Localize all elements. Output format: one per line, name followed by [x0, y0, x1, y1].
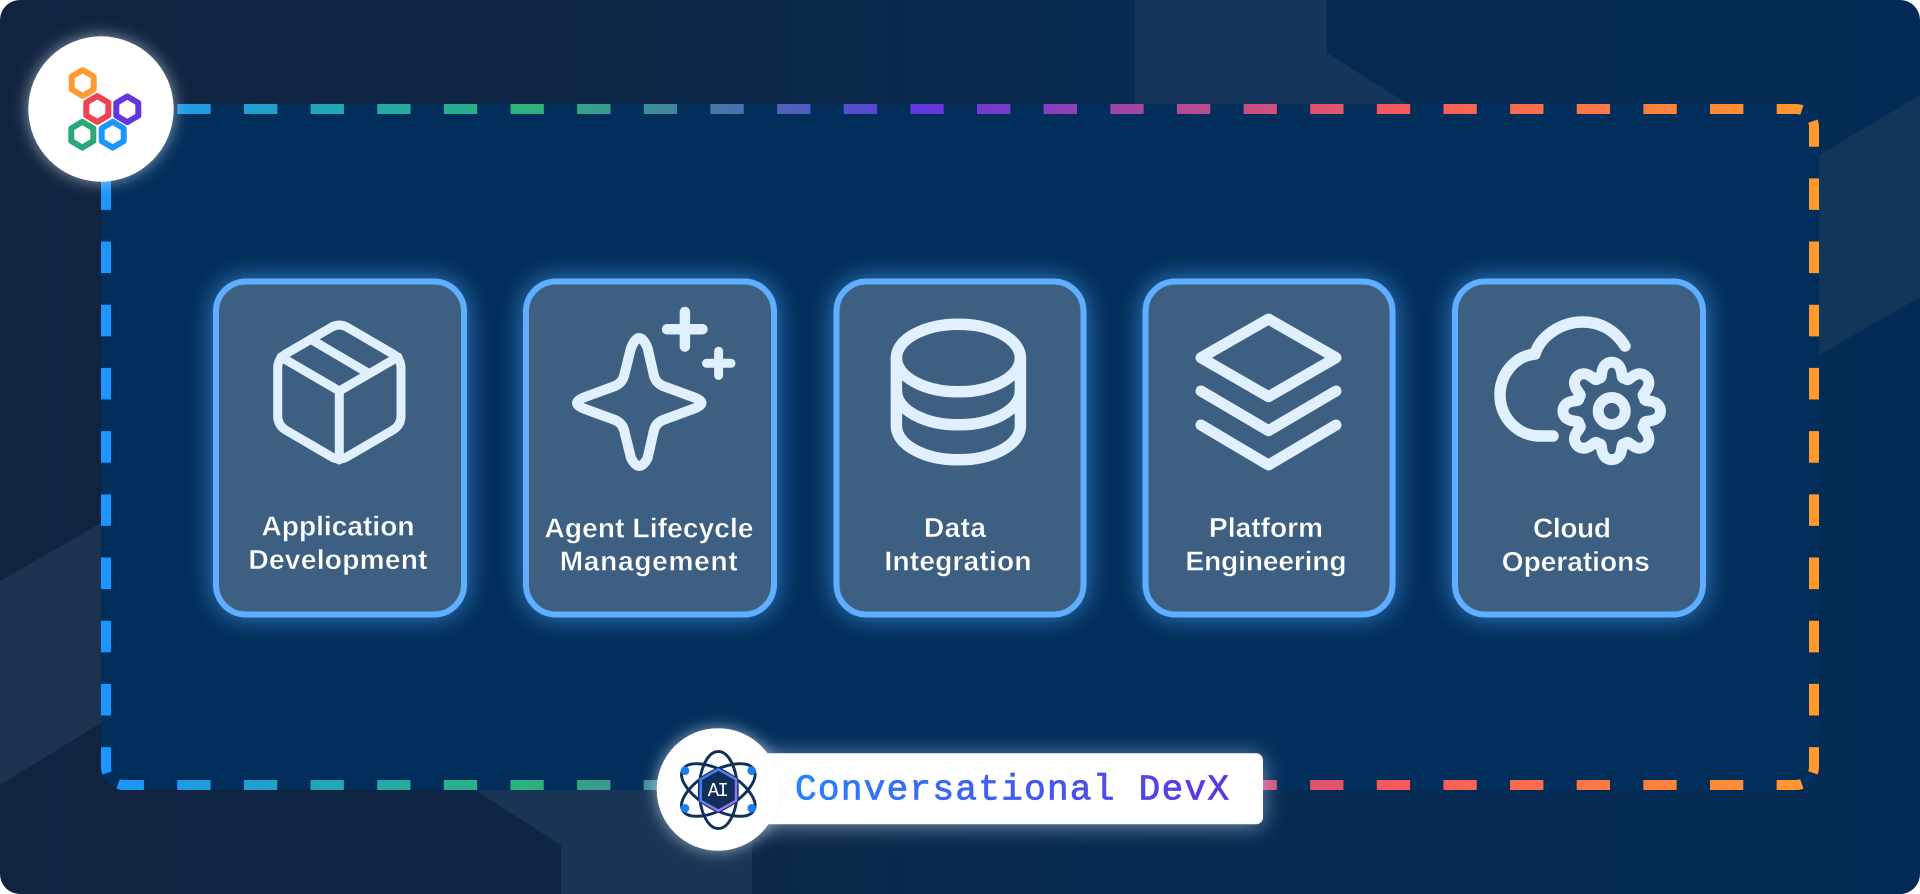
label: Engineering — [1186, 546, 1346, 576]
label: Cloud — [1533, 513, 1611, 544]
card: Application Development — [216, 282, 464, 614]
icon: box — [278, 325, 401, 460]
pill label: Conversational DevX — [795, 769, 1229, 810]
icon: AI atom: AI — [708, 780, 729, 802]
label — [1502, 513, 1650, 577]
icon: cloud with gear — [1500, 322, 1660, 460]
icon: sparkle star — [577, 312, 731, 466]
card: Agent Lifecycle Management — [526, 282, 774, 614]
label — [248, 511, 428, 575]
label: Integration — [884, 546, 1032, 576]
icon: database — [896, 324, 1020, 460]
badge: Conversational DevX — [657, 728, 1263, 851]
pill label — [720, 753, 1263, 824]
card: Platform Engineering — [1146, 282, 1392, 614]
label: Development — [248, 544, 428, 575]
card: Cloud Operations — [1455, 282, 1703, 614]
icon: AI atom — [657, 728, 779, 851]
label: Application — [262, 511, 414, 542]
card: Data Integration — [836, 282, 1084, 614]
label: Agent Lifecycle — [544, 512, 754, 543]
panel: dashed gradient frame — [101, 104, 1819, 790]
label: Management — [560, 546, 738, 577]
label: Platform — [1209, 512, 1323, 543]
label: Data — [924, 512, 986, 543]
icon: layers — [1201, 319, 1336, 465]
logo: hexagon cluster badge — [28, 36, 174, 182]
label — [1186, 512, 1346, 576]
label: Operations — [1502, 546, 1650, 577]
label — [884, 512, 1032, 576]
label — [544, 512, 754, 577]
